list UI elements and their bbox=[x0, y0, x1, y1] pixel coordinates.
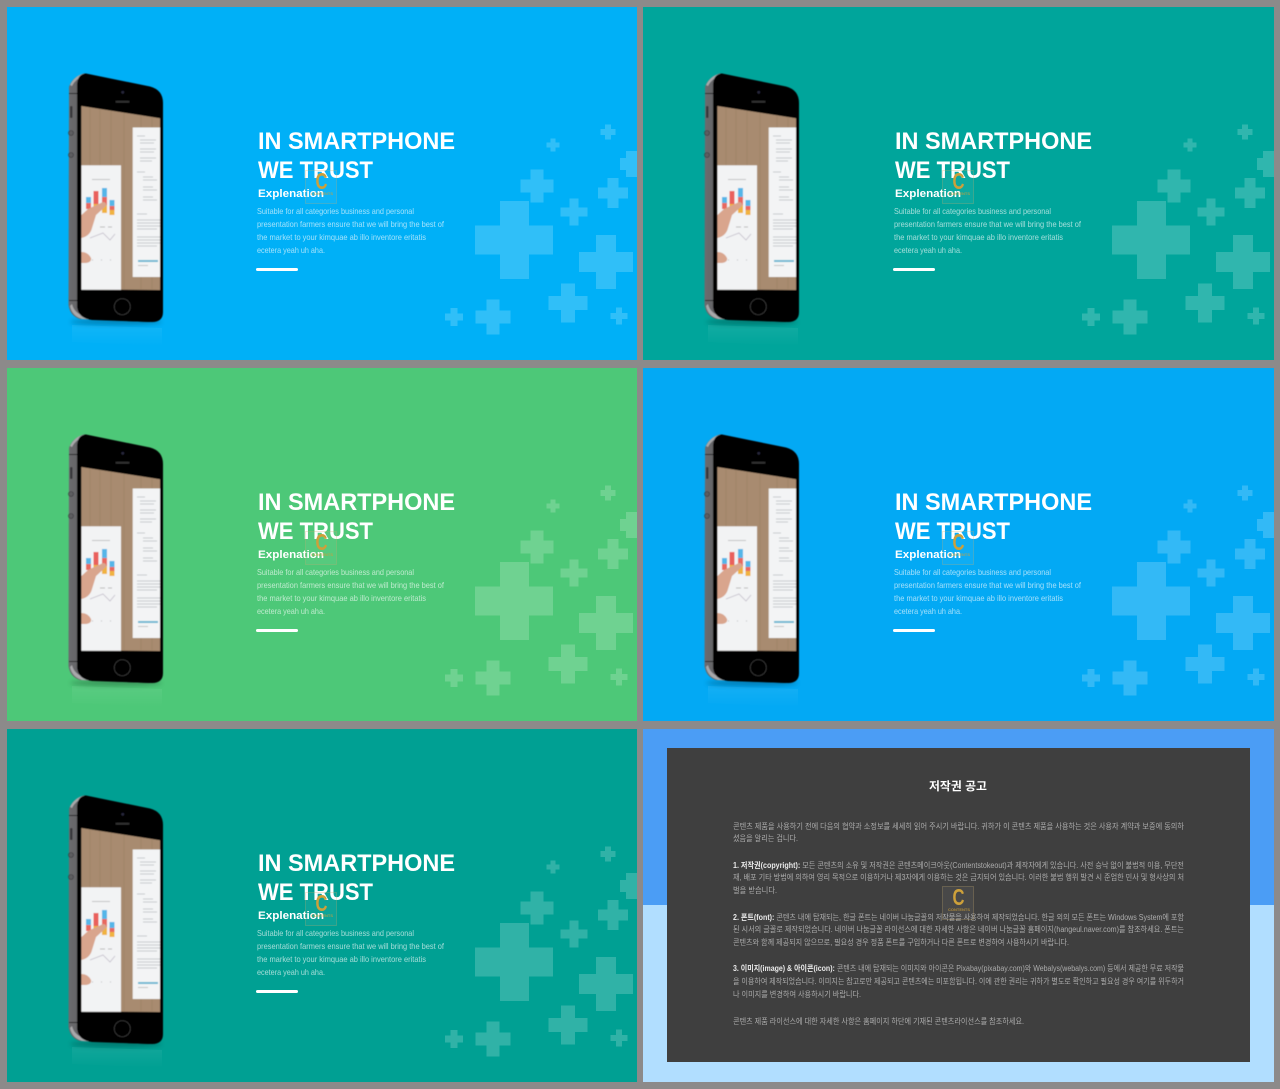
title: WE TRUST bbox=[258, 879, 373, 906]
description bbox=[894, 206, 1082, 255]
description: Suitable for all categories business and personal bbox=[257, 206, 414, 216]
section 2: font: 2. 폰트(font): 콘텐츠 내에 탑재되는, 한글 폰트는 네이버 나눔글꼴의 저작물을 사용하여 제작되었습니다. 한글 외의 모든 폰트는 Windows System에 포함 bbox=[733, 912, 1185, 922]
accent bar bbox=[256, 629, 298, 632]
description: Suitable for all categories business and personal bbox=[257, 567, 414, 577]
subtitle: Explenation bbox=[895, 188, 961, 200]
title bbox=[895, 489, 1092, 545]
description: ecetera yeah uh aha. bbox=[257, 245, 325, 255]
intro paragraph: 셨음을 알리는 겁니다. bbox=[733, 833, 798, 843]
panel: teal slide bbox=[643, 7, 1274, 360]
watermark bbox=[306, 529, 336, 564]
section 2: font: 된 시서의 글꼴로 제작되었습니다. 네이버 나눔글꼴 라이선스에 대한 자세한 사항은 네이버 나눔글꼴 홈페이지(hangeul.naver.com)를 참조하세요. 폰트는 bbox=[733, 924, 1184, 934]
closing note: 콘텐츠 제품 라이선스에 대한 자세한 사항은 홈페이지 하단에 기재된 콘텐츠라이선스를 참조하세요. bbox=[733, 1016, 1024, 1026]
description bbox=[257, 928, 445, 977]
phone mockup bbox=[68, 434, 163, 707]
description: ecetera yeah uh aha. bbox=[894, 245, 962, 255]
watermark bbox=[306, 168, 336, 204]
description: presentation farmers ensure that we will bring the best of bbox=[257, 219, 445, 229]
title: WE TRUST bbox=[258, 518, 373, 545]
subtitle: Explenation bbox=[895, 549, 961, 561]
accent bar bbox=[893, 268, 935, 271]
description: presentation farmers ensure that we will bring the best of bbox=[894, 580, 1082, 590]
section 3: image and icon: 을 이용하여 제작되었습니다. 이미지는 참고로만 제공되고 콘텐츠에는 미포함됩니다. 이에 관한 권리는 귀하가 별도로 확인하고 필요성 경우 여기를 위두하거 bbox=[733, 976, 1184, 986]
description bbox=[894, 567, 1082, 616]
description: the market to your kimquae ab illo inventore eritatis bbox=[894, 593, 1063, 603]
description: Suitable for all categories business and personal bbox=[894, 567, 1051, 577]
title bbox=[258, 489, 455, 545]
description bbox=[257, 567, 445, 616]
description: presentation farmers ensure that we will bring the best of bbox=[257, 580, 445, 590]
section 3: image and icon: 3. 이미지(image) & 아이콘(icon): 콘텐츠 내에 탑재되는 이미지와 아이콘은 Pixabay(pixabay.com)와 Webalys(webalys.com) 등에서 제공한 무료 저작물 bbox=[733, 963, 1184, 973]
panel: second blue slide bbox=[643, 368, 1274, 721]
section 1: copyright bbox=[733, 860, 1184, 895]
panel: copyright notice bbox=[643, 729, 1274, 1082]
intro paragraph: 콘텐츠 제품을 사용하기 전에 다음의 협약과 소정보를 세세히 읽어 주시기 바랍니다. 귀하가 이 콘텐츠 제품을 사용하는 것은 사용자 계약과 보증에 동의하 bbox=[733, 821, 1185, 831]
phone mockup bbox=[704, 74, 799, 346]
section 2: font bbox=[733, 912, 1185, 947]
intro paragraph bbox=[733, 821, 1185, 843]
title: WE TRUST bbox=[258, 157, 373, 184]
section 1: copyright: 1. 저작권(copyright): 모든 콘텐츠의 소유 및 저작권은 콘텐츠메이크아웃(Contentstokeout)과 제작자에게 있습니다. 사전 승낙 없이 불법적 이용, 무단전 bbox=[733, 860, 1184, 870]
accent bar bbox=[893, 629, 935, 632]
panel: dark teal slide bbox=[7, 729, 637, 1082]
title bbox=[258, 850, 455, 906]
title: IN SMARTPHONE bbox=[258, 850, 455, 877]
watermark bbox=[942, 168, 974, 204]
description: Suitable for all categories business and personal bbox=[257, 928, 414, 938]
section 3: image and icon: 나 이미지를 변경하여 사용하시기 바랍니다. bbox=[733, 989, 861, 999]
title bbox=[895, 128, 1092, 184]
watermark bbox=[942, 529, 974, 564]
accent bar bbox=[256, 990, 298, 993]
phone mockup bbox=[704, 434, 799, 707]
description: the market to your kimquae ab illo inventore eritatis bbox=[257, 954, 426, 964]
subtitle: Explenation bbox=[258, 549, 324, 561]
description: ecetera yeah uh aha. bbox=[257, 606, 325, 616]
title: IN SMARTPHONE bbox=[895, 128, 1092, 155]
copyright heading: 저작권 공고 bbox=[929, 779, 987, 793]
description: presentation farmers ensure that we will bring the best of bbox=[894, 219, 1082, 229]
description: ecetera yeah uh aha. bbox=[894, 606, 962, 616]
phone mockup bbox=[68, 796, 163, 1068]
phone mockup bbox=[68, 74, 163, 346]
description: Suitable for all categories business and personal bbox=[894, 206, 1051, 216]
title: IN SMARTPHONE bbox=[258, 489, 455, 516]
description: the market to your kimquae ab illo inventore eritatis bbox=[257, 232, 426, 242]
title: WE TRUST bbox=[895, 518, 1010, 545]
watermark bbox=[942, 884, 974, 920]
section 2: font: 콘텐츠와 함께 제공되지 않으므로, 필요성 경우 정품 폰트를 구입하거나 다른 폰트로 변경하여 사용하시기 바랍니다. bbox=[733, 937, 1069, 947]
subtitle: Explenation bbox=[258, 910, 324, 922]
description: the market to your kimquae ab illo inventore eritatis bbox=[257, 593, 426, 603]
description bbox=[257, 206, 445, 255]
watermark bbox=[306, 890, 336, 926]
section 1: copyright: 벌을 받습니다. bbox=[733, 885, 777, 895]
title: IN SMARTPHONE bbox=[258, 128, 455, 155]
description: ecetera yeah uh aha. bbox=[257, 967, 325, 977]
title: WE TRUST bbox=[895, 157, 1010, 184]
description: presentation farmers ensure that we will bring the best of bbox=[257, 941, 445, 951]
panel: blue slide bbox=[7, 7, 637, 360]
title bbox=[258, 128, 455, 184]
panel: green slide bbox=[7, 368, 637, 721]
section 3: image and icon bbox=[733, 963, 1184, 999]
subtitle: Explenation bbox=[258, 188, 324, 200]
section 1: copyright: 재, 배포 기타 방법에 의하여 영리 목적으로 이용하거나 제3자에게 이용하는 것은 금지되어 있습니다. 이러한 불법 행위 발견 시 준엄한 민사 및 형사상의 처 bbox=[733, 872, 1184, 882]
title: IN SMARTPHONE bbox=[895, 489, 1092, 516]
description: the market to your kimquae ab illo inventore eritatis bbox=[894, 232, 1063, 242]
accent bar bbox=[256, 268, 298, 271]
